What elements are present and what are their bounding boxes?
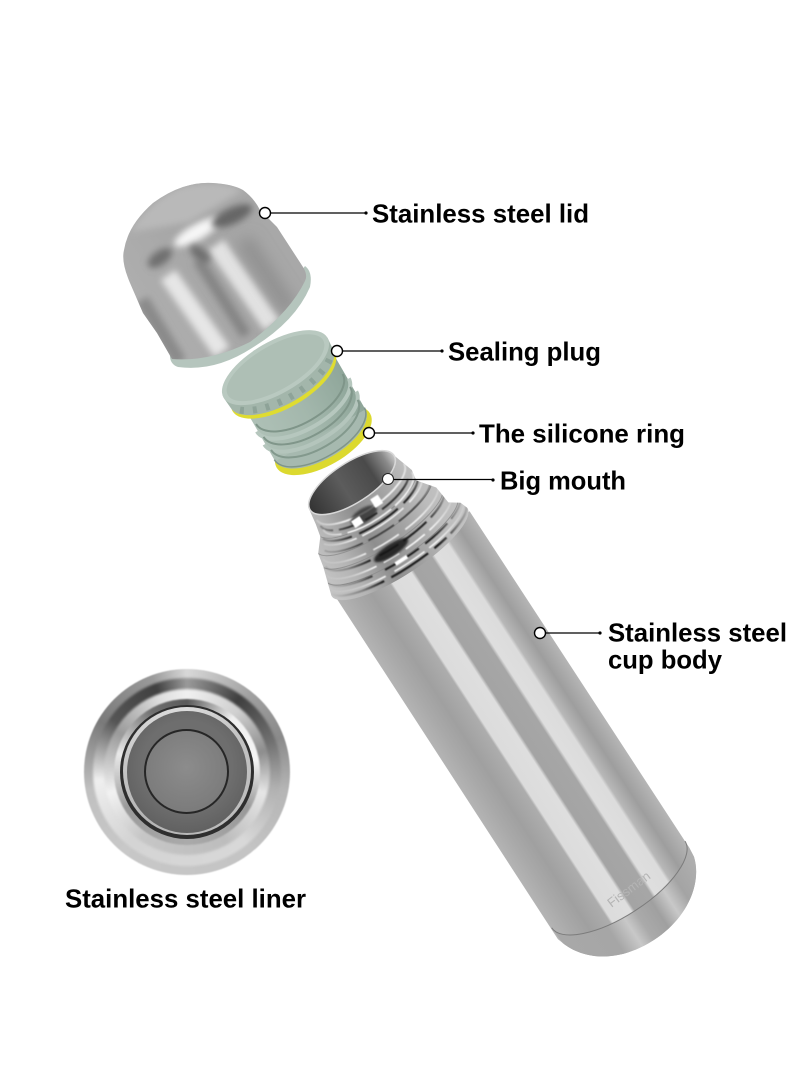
lid dome — [123, 182, 306, 360]
base section below seam — [552, 841, 721, 983]
leader: sealing plug — [332, 346, 444, 356]
leader: silicone ring — [364, 428, 475, 438]
chrome neck — [308, 456, 468, 600]
thermos body — [308, 450, 696, 956]
leader: big mouth — [382, 474, 495, 484]
stainless steel lid — [123, 182, 311, 368]
lower silicone ring — [264, 392, 383, 489]
brand mark: Fissman — [604, 868, 653, 910]
sealing plug with silicone rings — [211, 315, 383, 495]
neck centre reflections — [349, 504, 378, 526]
threaded section — [243, 355, 378, 483]
label: cup body — [608, 618, 787, 674]
inner plate — [144, 729, 229, 814]
lid rim — [170, 266, 311, 368]
cup body cylinder — [336, 511, 721, 984]
label: cup body: Stainless steel — [608, 618, 787, 648]
mouth opening — [299, 439, 405, 527]
label: sealing plug: Sealing plug — [448, 336, 601, 366]
liner top view — [84, 668, 290, 876]
label: cup body: cup body — [608, 644, 723, 674]
plug cap — [211, 315, 346, 431]
label: stainless steel lid: Stainless steel lid — [372, 198, 589, 228]
leader: cup body — [534, 628, 602, 638]
upper silicone ring — [219, 330, 348, 434]
label: stainless steel liner: Stainless steel liner — [65, 884, 306, 914]
label: big mouth: Big mouth — [500, 466, 626, 496]
label: silicone ring: The silicone ring — [479, 418, 685, 448]
leader: stainless steel lid — [260, 208, 368, 218]
